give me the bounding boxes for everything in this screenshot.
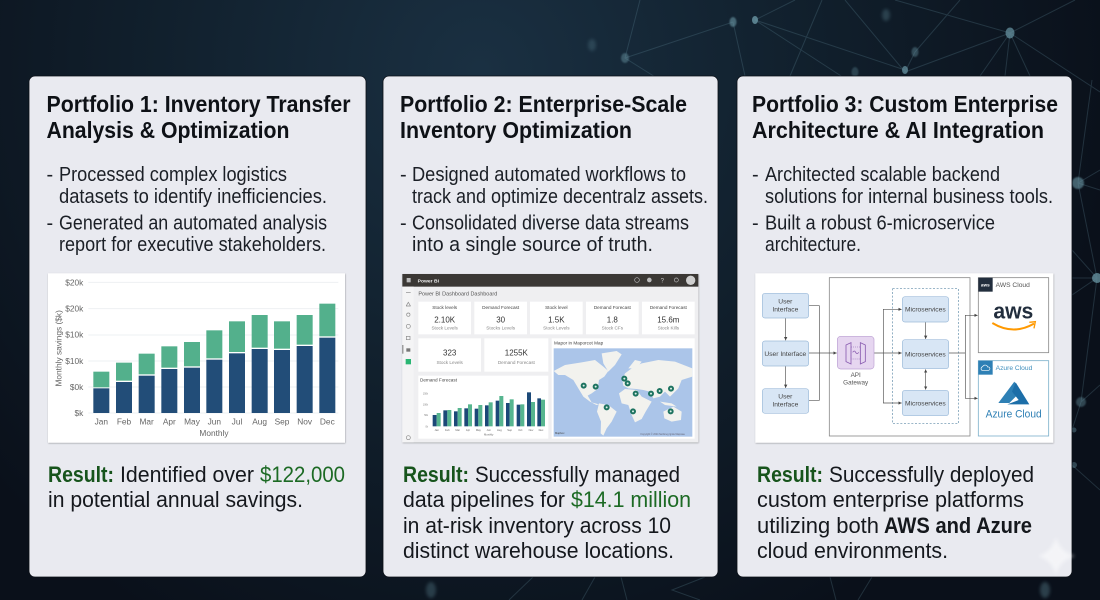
KPI cards: Stock levels: [432, 305, 458, 310]
KPI cards: Demand Forecast: [482, 305, 520, 310]
KPI cards: [418, 302, 695, 439]
API gateway: API: [851, 372, 861, 379]
dashboard screenshot: Power BI: Power BI Dashboard Dashboard: [418, 292, 497, 298]
map panel: Mapor in Maporcot Map: [554, 340, 604, 345]
bar chart: monthly savings: Sep: [275, 417, 290, 427]
bar chart: monthly savings: [48, 273, 345, 443]
result: portfolio 2: distinct warehouse locations.: [403, 538, 674, 563]
KPI cards: 15.6m: [657, 315, 680, 324]
map panel: Copyright © 2024 Sanforeg Ignite Mapcase: [640, 433, 686, 436]
demand forecast chart: Jan: [435, 428, 439, 432]
heading: portfolio 1: [46, 91, 350, 143]
architecture diagram: [755, 273, 1053, 443]
demand forecast chart: 150k: [423, 393, 429, 395]
bar chart: monthly savings: Mar: [139, 417, 154, 427]
demand forecast chart: Feb: [445, 428, 450, 432]
bar chart: monthly savings: Feb: [117, 417, 132, 427]
bullet list: portfolio 3: Built a robust 6-microservice: [765, 212, 995, 234]
result: portfolio 1: Identified over: [120, 462, 254, 487]
result: portfolio 3: utilizing both: [757, 513, 879, 538]
demand forecast chart: 50k: [424, 415, 429, 417]
bar chart: monthly savings: $10k: [65, 330, 84, 340]
result: portfolio 2: $14.1 million: [571, 487, 691, 512]
demand forecast chart: Apr: [466, 428, 470, 432]
demand forecast chart: Oct: [518, 428, 523, 432]
panel: portfolio 1: [29, 76, 366, 577]
KPI cards: Demand Forecast: [650, 305, 688, 310]
result: portfolio 1: in potential annual savings.: [48, 487, 303, 512]
AWS cloud box: [978, 278, 1049, 353]
icon: sparkle watermark: [1038, 537, 1075, 575]
bullet list: portfolio 3: Architected scalable backend: [765, 164, 1000, 186]
KPI cards: Demand Forecast: [594, 305, 632, 310]
heading: portfolio 2: Inventory Optimization: [400, 117, 632, 143]
demand forecast chart: Mar: [455, 428, 460, 432]
heading: portfolio 2: [400, 91, 687, 143]
result: portfolio 2: Result:: [403, 462, 469, 487]
KPI cards: Stock Levels: [436, 360, 464, 365]
bullet list: portfolio 3: [752, 164, 1053, 256]
dashboard top bar: [402, 274, 698, 287]
KPI cards: Stock CFs: [602, 326, 624, 331]
microservice boxes: [902, 297, 949, 416]
dashboard top bar: Power BI: [418, 278, 440, 284]
result: portfolio 3: [757, 462, 1034, 563]
AWS cloud box: aws: [981, 282, 990, 287]
bar chart: monthly savings: May: [184, 417, 201, 427]
demand forecast chart: 0k: [426, 426, 429, 428]
map panel: [554, 340, 692, 437]
result: portfolio 3: cloud environments.: [757, 538, 948, 563]
KPI cards: Stock Levels: [431, 326, 459, 331]
user interface boxes: User: [778, 299, 793, 306]
bar chart: monthly savings: $20k: [65, 304, 84, 314]
KPI cards: 323: [443, 349, 457, 358]
bar chart: monthly savings: Nov: [297, 417, 313, 427]
bullet list: portfolio 3: architecture.: [765, 234, 861, 256]
demand forecast chart: 100k: [423, 404, 429, 406]
result: portfolio 2: [403, 462, 691, 563]
KPI cards: Stocks Levels: [486, 326, 516, 331]
demand forecast chart: Aug: [497, 428, 502, 432]
dashboard top bar: ?: [661, 278, 665, 284]
bar chart: monthly savings: Monthly: [199, 428, 229, 438]
KPI cards: 1255K: [505, 349, 529, 358]
bullet list: portfolio 2: track and optimize decentralz assets.: [412, 186, 708, 208]
dashboard sidebar: [402, 287, 414, 442]
bullet list: portfolio 1: datasets to identify inefficiencies.: [59, 186, 327, 208]
bullet list: portfolio 2: -: [400, 164, 407, 186]
microservice boxes: Microservices: [905, 400, 946, 407]
AWS cloud box: AWS Cloud: [996, 282, 1030, 289]
bullet list: portfolio 2: Designed automated workflows to: [412, 164, 686, 186]
heading: portfolio 3: [752, 91, 1058, 143]
user interface boxes: [762, 293, 809, 413]
heading: portfolio 1: Analysis & Optimization: [46, 117, 290, 143]
bar chart: monthly savings: $10k: [65, 356, 84, 366]
KPI cards: Stock level: [545, 305, 568, 310]
AWS cloud box: aws: [993, 298, 1033, 323]
bar chart: monthly savings: Apr: [163, 417, 176, 427]
heading: portfolio 3: Architecture & AI Integration: [752, 117, 1044, 143]
demand forecast chart: Nov: [529, 428, 534, 432]
result: portfolio 3: Successfully deployed: [829, 462, 1034, 487]
result: portfolio 1: $122,000: [260, 462, 345, 487]
KPI cards: 1.8: [607, 315, 618, 324]
bullet list: portfolio 1: -: [46, 164, 53, 186]
demand forecast chart: Demand Forecast: [420, 378, 458, 383]
API gateway: Gateway: [843, 380, 869, 387]
KPI cards: 30: [496, 315, 506, 324]
result: portfolio 3: AWS and Azure: [884, 513, 1032, 538]
bar chart: monthly savings: Jan: [95, 417, 108, 427]
Azure cloud box: Azure Cloud: [986, 409, 1042, 421]
bar chart: monthly savings: Jun: [208, 417, 221, 427]
Azure cloud box: Azure Cloud: [996, 365, 1033, 372]
demand forecast chart: Sep: [507, 428, 513, 432]
bar chart: monthly savings: Monthly savings ($k): [54, 310, 64, 387]
Azure cloud box: [978, 361, 1049, 436]
bullet list: portfolio 1: [46, 164, 327, 256]
dashboard screenshot: Power BI: [402, 274, 698, 442]
bullet list: portfolio 2: -: [400, 212, 407, 234]
user interface boxes: Interface: [772, 307, 799, 314]
bar chart: monthly savings: Jul: [232, 417, 242, 427]
panel: portfolio 3: [737, 76, 1072, 577]
bullet list: portfolio 2: [400, 164, 708, 256]
heading: portfolio 2: Portfolio 2: Enterprise-Scale: [400, 91, 687, 117]
arrows: [786, 306, 978, 403]
demand forecast chart: Monthly: [484, 433, 494, 437]
bullet list: portfolio 2: Consolidated diverse data streams: [412, 212, 689, 234]
result: portfolio 1: Result:: [48, 462, 114, 487]
bar chart: monthly savings: $0k: [70, 382, 84, 392]
KPI cards: 2.10K: [434, 315, 456, 324]
result: portfolio 2: Successfully managed: [475, 462, 680, 487]
heading: portfolio 3: Portfolio 3: Custom Enterprise: [752, 91, 1058, 117]
bar chart: monthly savings: $20k: [65, 277, 84, 287]
user interface boxes: User Interface: [764, 351, 807, 358]
map panel: Mapbox: [555, 431, 565, 435]
demand forecast chart: May: [476, 428, 482, 432]
result: portfolio 1: [48, 462, 345, 512]
demand forecast chart: Dec: [539, 428, 544, 432]
API gateway: [837, 336, 874, 387]
result: portfolio 2: in at-risk inventory across 10: [403, 513, 671, 538]
microservice boxes: Microservices: [905, 351, 946, 358]
result: portfolio 2: data pipelines for: [403, 487, 565, 512]
user interface boxes: User: [778, 394, 793, 401]
bullet list: portfolio 3: solutions for internal business tools.: [765, 186, 1053, 208]
panel: portfolio 2: [383, 76, 718, 577]
microservice boxes: Microservices: [905, 307, 946, 314]
bar chart: monthly savings: $k: [75, 408, 84, 418]
bullet list: portfolio 1: report for executive stakeholders.: [59, 234, 326, 256]
network pattern background: [426, 0, 1100, 600]
user interface boxes: Interface: [772, 402, 799, 409]
demand forecast chart: Jun: [487, 428, 491, 432]
KPI cards: Demand Forecast: [498, 360, 536, 365]
heading: portfolio 1: Portfolio 1: Inventory Transfer: [46, 91, 350, 117]
result: portfolio 3: custom enterprise platforms: [757, 487, 1024, 512]
bullet list: portfolio 1: -: [46, 212, 53, 234]
bullet list: portfolio 1: Processed complex logistics: [59, 164, 287, 186]
KPI cards: 1.5K: [548, 315, 565, 324]
bullet list: portfolio 2: into a single source of truth.: [412, 234, 653, 256]
result: portfolio 3: Result:: [757, 462, 823, 487]
bullet list: portfolio 3: -: [752, 212, 759, 234]
demand forecast chart: [420, 378, 545, 437]
KPI cards: Stock Kills: [658, 326, 680, 331]
bar chart: monthly savings: Aug: [252, 417, 267, 427]
KPI cards: Stock Levels: [543, 326, 570, 331]
bullet list: portfolio 3: -: [752, 164, 759, 186]
bullet list: portfolio 1: Generated an automated analysis: [59, 212, 327, 234]
bar chart: monthly savings: Dec: [320, 417, 335, 427]
